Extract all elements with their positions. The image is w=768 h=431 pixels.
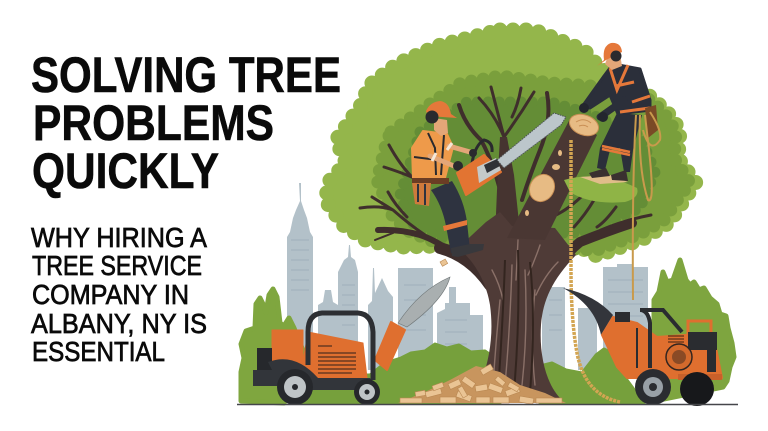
- title: PROBLEMS: [33, 95, 274, 151]
- tree trunk: [458, 137, 576, 400]
- canopy light outer foliage: [325, 30, 696, 256]
- city skyline: [287, 183, 648, 387]
- subtitle: WHY HIRING A: [31, 222, 207, 253]
- title: SOLVING TREE: [31, 47, 341, 103]
- subtitle: [31, 222, 207, 367]
- platform branch: [564, 175, 638, 203]
- chainsaw: [457, 113, 566, 195]
- left chipper front wheel: [354, 379, 380, 405]
- ground line: [237, 404, 738, 406]
- canopy dark interior foliage: [400, 102, 655, 238]
- illustration: [237, 30, 738, 406]
- right shrubs: [540, 260, 734, 403]
- worker on right on branch: [579, 43, 658, 181]
- right wood chipper: [563, 288, 722, 406]
- tree canopy: [325, 30, 696, 256]
- hanging chain: [571, 140, 620, 402]
- subtitle: ALBANY, NY IS: [31, 308, 207, 339]
- title: [31, 47, 341, 199]
- centre shrubs: [290, 344, 500, 403]
- left shrub: [241, 289, 304, 403]
- cut limb: [507, 110, 602, 240]
- canopy mid foliage: [377, 76, 690, 250]
- subtitle: TREE SERVICE: [32, 250, 202, 281]
- subtitle: ESSENTIAL: [32, 336, 165, 367]
- left wood chipper: [253, 277, 450, 405]
- climbing rope: [633, 112, 660, 300]
- wood chip pile: [398, 259, 566, 404]
- left chipper rear wheel: [277, 369, 313, 405]
- right chipper front wheel: [635, 369, 671, 405]
- right chipper rear wheel: [680, 372, 714, 406]
- worker on left with chainsaw: [412, 101, 484, 257]
- title: QUICKLY: [32, 143, 219, 199]
- subtitle: COMPANY IN: [32, 279, 189, 310]
- tree branches: [360, 87, 651, 285]
